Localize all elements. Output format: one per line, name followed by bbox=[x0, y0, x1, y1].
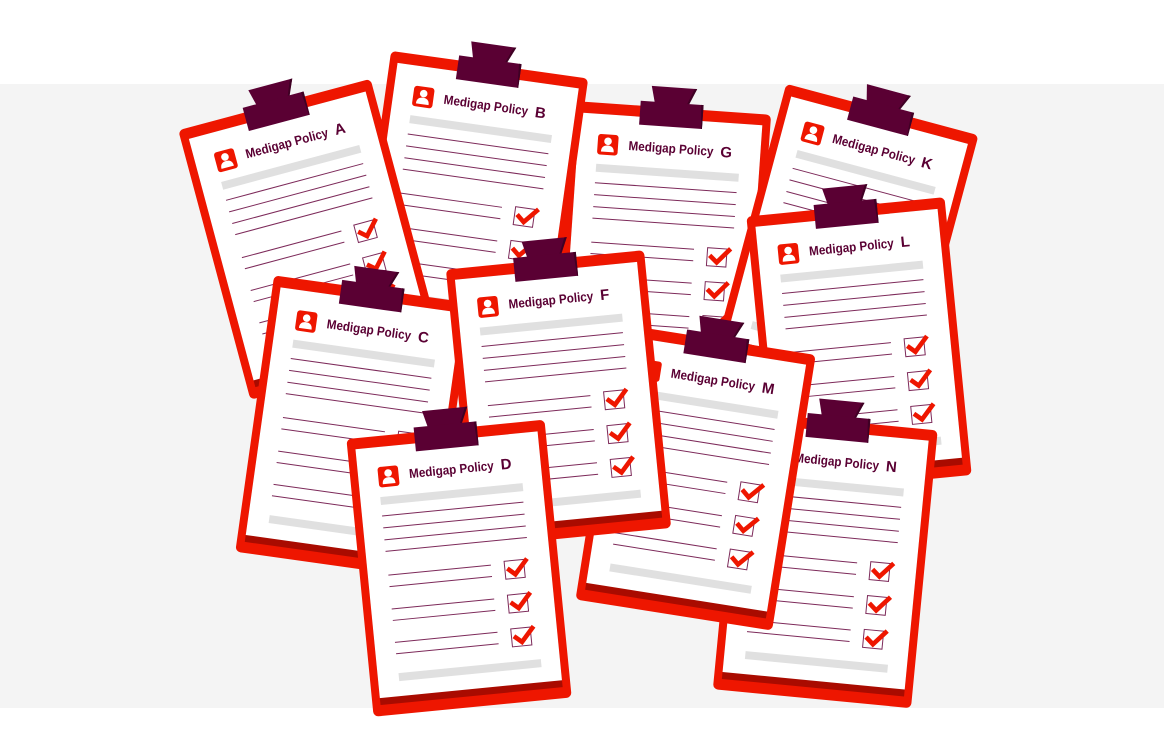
clipboard: Medigap Policy A bbox=[173, 59, 443, 400]
title: Policy D: D bbox=[500, 456, 512, 474]
title: Policy G: G bbox=[720, 144, 733, 162]
title: Policy N: N bbox=[885, 458, 898, 476]
clipboard: Medigap Policy C bbox=[235, 255, 474, 579]
title: Policy M: Medigap Policy bbox=[670, 366, 757, 394]
title: Policy B: Medigap Policy bbox=[443, 92, 530, 119]
clipboard: Medigap Policy L bbox=[744, 177, 972, 494]
clipboard: Medigap Policy M bbox=[576, 304, 819, 631]
title: Policy F: F bbox=[599, 286, 610, 304]
title: Policy G: Medigap Policy bbox=[628, 138, 715, 159]
clipboard: Medigap Policy D bbox=[344, 399, 572, 717]
title: Policy A: Medigap Policy bbox=[244, 125, 330, 161]
title: Policy N: Medigap Policy bbox=[794, 450, 880, 473]
title: Policy D: Medigap Policy bbox=[408, 458, 495, 481]
title: Policy A: A bbox=[333, 120, 348, 139]
title: Policy B: B bbox=[534, 104, 547, 122]
clipboard: Medigap Policy F bbox=[444, 230, 671, 547]
title: Policy L: Medigap Policy bbox=[808, 235, 895, 259]
clipboard: Medigap Policy N bbox=[713, 391, 940, 708]
title: Policy M: M bbox=[761, 380, 776, 398]
clipboard: Medigap Policy G bbox=[553, 80, 773, 393]
title: Policy K: K bbox=[919, 154, 934, 174]
title: Policy F: Medigap Policy bbox=[508, 288, 595, 312]
clipboard: Medigap Policy B bbox=[352, 31, 591, 355]
clipboard: Medigap Policy K bbox=[714, 64, 984, 405]
title: Policy K: Medigap Policy bbox=[831, 131, 918, 168]
title: Policy C: C bbox=[417, 329, 430, 347]
title: Policy C: Medigap Policy bbox=[326, 316, 413, 343]
title: Policy L: L bbox=[900, 233, 911, 251]
